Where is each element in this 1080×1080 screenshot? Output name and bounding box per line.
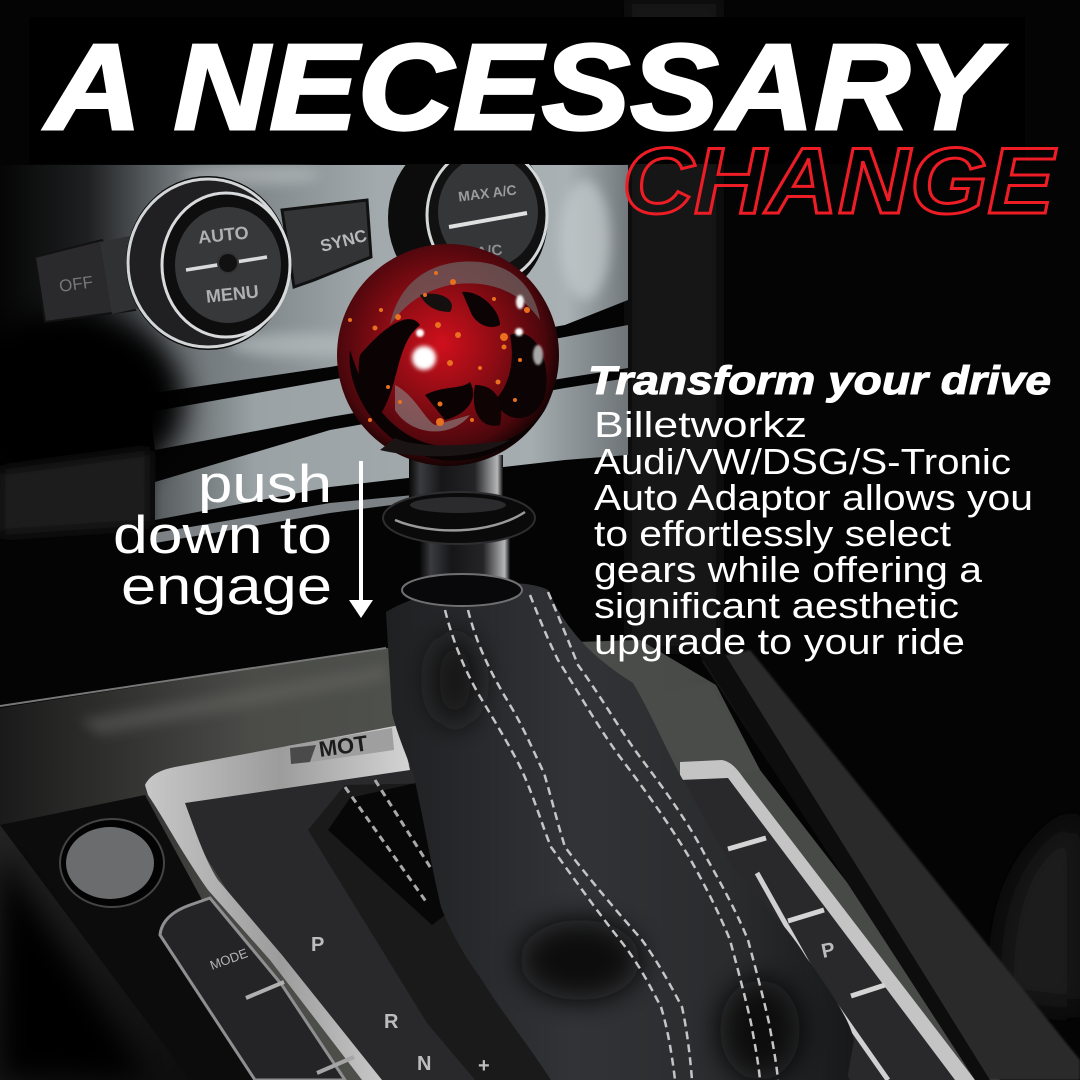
label: push down to engage: engage (121, 557, 332, 616)
title banner (29, 17, 1025, 164)
body text: Billetworkz (594, 404, 807, 445)
dial: max a/c: A/C (476, 242, 503, 262)
OFF button: OFF (58, 272, 94, 296)
dial: max a/c: MAX A/C (457, 182, 517, 205)
arrow: push down (349, 461, 373, 618)
dial: auto menu (126, 176, 290, 350)
right side buttons (728, 838, 885, 996)
label: push down to engage: push (198, 455, 332, 514)
black marbling (462, 292, 500, 327)
gear letters: + (478, 1055, 490, 1077)
dial: auto menu: MENU (205, 281, 260, 307)
right side buttons: P (819, 939, 837, 963)
4MOTION badge: MOT (317, 730, 370, 762)
gear letters: R (384, 1011, 399, 1033)
body text: Audi/VW/DSG/S-Tronic (594, 441, 1011, 482)
4MOTION badge (287, 728, 394, 765)
OFF button (35, 236, 140, 322)
gear panel (170, 765, 965, 1080)
grey bottom reflection (395, 385, 470, 431)
title: change outline: CHANGE (622, 128, 1057, 233)
silver trim surround (145, 725, 975, 1080)
upper reflection (390, 261, 540, 325)
lower console surface (0, 640, 1000, 1080)
red marbled knob (337, 244, 559, 466)
heading: transform your drive: Transform your drive (588, 359, 1051, 403)
SYNC button (282, 200, 371, 287)
title: a necessary: A NECESSARY (43, 19, 1006, 155)
body text: Auto Adaptor allows you (594, 477, 1033, 518)
mode button (160, 898, 354, 1080)
gear letters (311, 934, 490, 1077)
SYNC button: SYNC (318, 226, 369, 256)
inner silver recess line right (757, 873, 888, 1080)
dial: max a/c (388, 133, 548, 303)
upper right dark interior (628, 0, 1080, 1010)
right gloss strip and pillar (690, 640, 1080, 1080)
body text: gears while offering a (594, 549, 983, 590)
body text (594, 404, 1033, 662)
gear letters: P (311, 934, 324, 956)
leather gear boot (386, 583, 854, 1080)
body text: to effortlessly select (594, 513, 951, 554)
gear letters: N (417, 1053, 431, 1075)
dial: auto menu: AUTO (197, 222, 250, 248)
label: push down to engage (113, 455, 332, 616)
label: push down to engage: down to (113, 506, 332, 565)
body text: significant aesthetic (594, 585, 959, 626)
climate panel silver bands (0, 165, 628, 543)
black gloss panel with start button (0, 795, 300, 1080)
body text: upgrade to your ride (594, 621, 965, 662)
mode button: MODE (208, 945, 250, 973)
shifter tunnel (308, 778, 850, 1080)
shifter stem (383, 455, 535, 606)
